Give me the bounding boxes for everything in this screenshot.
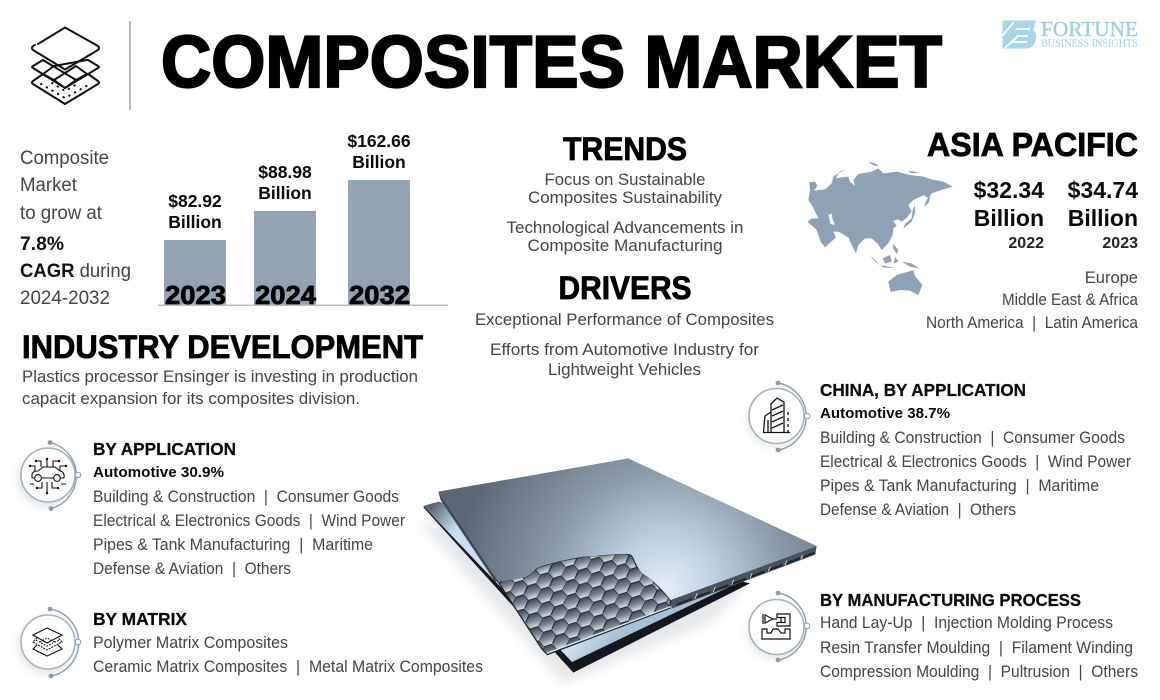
logo: Fortune Business Insights — [1002, 17, 1138, 50]
value 2023: $34.74 — [1068, 177, 1138, 203]
icon: building — [747, 381, 810, 452]
heading: BY MANUFACTURING PROCESS — [820, 590, 1081, 610]
section: by application — [18, 439, 405, 578]
industry development: Plastics processor Ensinger is investing in production — [22, 368, 418, 386]
segment list: Defense & Aviation | Others — [820, 501, 1016, 519]
segment list: Resin Transfer Moulding | Filament Winding — [820, 639, 1133, 657]
bar 2032: $162.66 — [347, 131, 411, 151]
heading: BY APPLICATION — [93, 439, 236, 459]
section: China by application — [747, 380, 1131, 519]
value 2023 — [1068, 177, 1138, 252]
icon: moulding machine — [747, 591, 810, 662]
other regions: Europe — [1085, 269, 1138, 287]
CAGR text block: Composite — [20, 148, 109, 169]
bar 2023: 2023 — [165, 280, 226, 310]
segment list: Electrical & Electronics Goods | Wind Power — [820, 453, 1131, 471]
other regions — [926, 269, 1139, 332]
lead segment: Automotive 38.7% — [820, 405, 950, 422]
segment list: Compression Moulding | Pultrusion | Others — [820, 663, 1138, 681]
value 2023: 2023 — [1102, 235, 1138, 252]
bar 2023: $82.92 — [168, 191, 222, 211]
bar 2024: $88.98 — [258, 162, 312, 182]
CAGR text block: to grow at — [20, 203, 103, 224]
CAGR text block: Market — [20, 175, 78, 196]
segment list: Building & Construction | Consumer Goods — [820, 429, 1125, 447]
value 2022: Billion — [974, 205, 1044, 231]
drivers: Efforts from Automotive Industry for — [490, 341, 760, 359]
segment list — [820, 614, 1138, 681]
heading: CHINA, BY APPLICATION — [820, 380, 1026, 400]
CAGR text block: 7.8% — [20, 234, 64, 255]
bar 2024 — [254, 162, 317, 310]
honeycomb core — [497, 553, 671, 655]
bar 2032: 2032 — [349, 280, 410, 310]
CAGR text block: 2024-2032 — [20, 288, 110, 309]
logo: Fortune Business Insights: BUSINESS INSIGHTS — [1041, 38, 1138, 50]
trends: TRENDS — [563, 131, 687, 167]
segment list — [93, 634, 483, 676]
logo: Fortune Business Insights: FORTUNE — [1041, 17, 1138, 41]
drivers: DRIVERS — [558, 270, 692, 306]
drivers: Exceptional Performance of Composites — [475, 311, 774, 329]
segment list: Hand Lay-Up | Injection Molding Process — [820, 614, 1113, 632]
CAGR text block: CAGR during — [20, 261, 131, 282]
heading: BY MATRIX — [93, 609, 187, 629]
segment list: Pipes & Tank Manufacturing | Maritime — [93, 536, 373, 554]
trends — [506, 131, 744, 255]
segment list: Polymer Matrix Composites — [93, 634, 288, 652]
lead segment: Automotive 30.9% — [93, 464, 224, 481]
segment list: Ceramic Matrix Composites | Metal Matrix Composites — [93, 658, 483, 676]
bar 2032 — [347, 131, 411, 310]
icon: Asia Pacific map — [807, 162, 953, 295]
segment list: Defense & Aviation | Others — [93, 560, 291, 578]
upper sheet — [438, 458, 817, 600]
section: by manufacturing process — [747, 590, 1138, 681]
icon: matrix layers — [18, 607, 81, 678]
industry development: INDUSTRY DEVELOPMENT — [22, 329, 423, 365]
trends: Composites Sustainability — [528, 189, 723, 207]
drivers — [475, 270, 774, 379]
industry development — [22, 329, 423, 408]
Asia Pacific heading: ASIA PACIFIC — [927, 126, 1138, 163]
icon: layered composite sheets — [32, 28, 99, 104]
industry development: capacit expansion for its composites division. — [22, 390, 360, 408]
other regions: North America | Latin America — [926, 314, 1139, 332]
section: by matrix — [18, 607, 483, 678]
title: COMPOSITES MARKET — [161, 22, 942, 103]
bar chart: market size — [158, 131, 448, 310]
value 2022 — [974, 177, 1044, 252]
lower sheet — [423, 503, 750, 673]
segment list — [820, 429, 1131, 519]
segment list — [93, 488, 405, 578]
trends: Composite Manufacturing — [528, 237, 722, 255]
bar 2023: Billion — [168, 212, 222, 232]
title divider — [129, 21, 131, 110]
value 2022: $32.34 — [974, 177, 1044, 203]
panel side edge — [671, 546, 817, 609]
drivers: Lightweight Vehicles — [548, 361, 701, 379]
value 2022: 2022 — [1008, 235, 1044, 252]
trends: Focus on Sustainable — [544, 171, 706, 189]
value 2023: Billion — [1068, 205, 1138, 231]
icon: automotive circuit — [18, 440, 81, 511]
trends: Technological Advancements in — [506, 219, 744, 237]
segment list: Electrical & Electronics Goods | Wind Power — [93, 512, 405, 530]
bar 2023 — [164, 191, 226, 310]
composite honeycomb panel illustration — [420, 458, 817, 683]
CAGR text block — [20, 148, 131, 309]
bar 2024: Billion — [258, 183, 312, 203]
bar 2024: 2024 — [255, 280, 317, 310]
other regions: Middle East & Africa — [1002, 291, 1139, 309]
segment list: Building & Construction | Consumer Goods — [93, 488, 399, 506]
bar 2032: Billion — [352, 152, 406, 172]
segment list: Pipes & Tank Manufacturing | Maritime — [820, 477, 1099, 495]
